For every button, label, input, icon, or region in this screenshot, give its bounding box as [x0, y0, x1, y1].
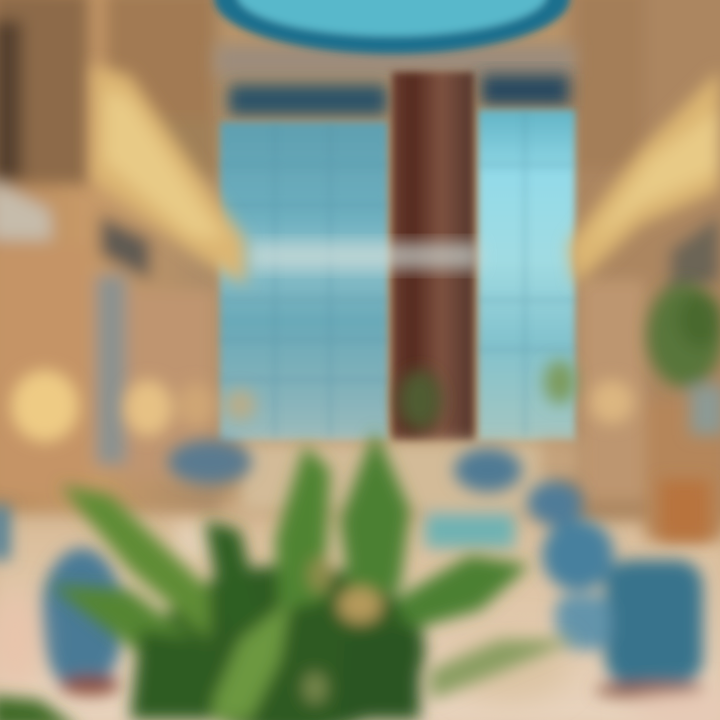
- left yellow beam: [92, 65, 245, 285]
- blue chairs right: [454, 448, 705, 698]
- left wall and columns: [0, 0, 220, 510]
- lamps: [11, 370, 634, 442]
- window mullions: [220, 110, 575, 440]
- right wall and columns: [565, 0, 720, 540]
- small background plants: [398, 360, 576, 430]
- ceiling band: [215, 45, 575, 77]
- floor warm patches: [0, 590, 720, 720]
- light floor middle and water: [175, 440, 710, 560]
- hanging plant right: [647, 283, 720, 435]
- central column: [392, 72, 474, 442]
- floor: [0, 510, 720, 720]
- right yellow beam: [568, 70, 720, 285]
- foreground green plant: [0, 430, 575, 720]
- skylight dome: [214, 0, 570, 54]
- blue chairs left: [0, 440, 252, 695]
- window panes: [220, 110, 575, 442]
- dark window header: [228, 74, 570, 116]
- horizontal light band: [250, 242, 480, 270]
